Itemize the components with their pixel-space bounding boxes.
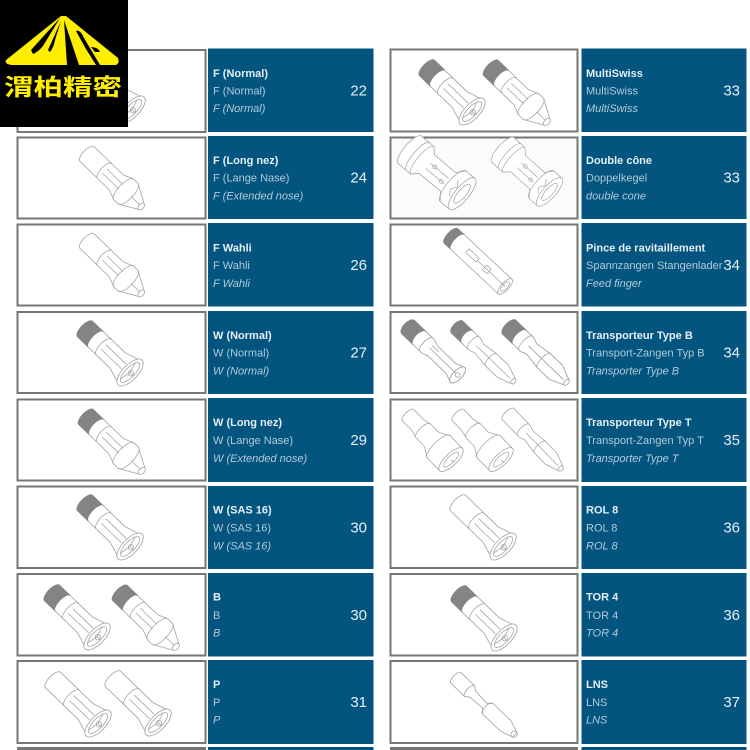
labels: MultiSwiss — [586, 103, 638, 115]
label panel — [582, 660, 746, 744]
labels: W (SAS 16) — [213, 504, 272, 516]
row: Double cone — [390, 131, 746, 219]
label panel — [582, 486, 746, 569]
row: P — [18, 660, 374, 744]
image panel — [390, 661, 578, 743]
image panel — [390, 50, 578, 132]
page number: 26 — [350, 257, 367, 274]
labels — [213, 242, 252, 290]
next row: cropped right panels — [390, 747, 746, 750]
image panel — [390, 400, 578, 480]
page number: 37 — [723, 694, 740, 711]
labels — [586, 242, 723, 290]
image panel — [390, 574, 578, 656]
collet drawings — [398, 316, 575, 391]
label panel — [208, 136, 374, 219]
collet drawing — [70, 488, 148, 564]
labels: Transporteur Type B — [586, 330, 693, 342]
image panel — [18, 50, 206, 132]
collet drawings — [38, 664, 176, 741]
row: F Wahli — [18, 223, 374, 306]
labels — [586, 155, 652, 202]
labels: W (Normal) — [213, 330, 272, 342]
labels — [213, 592, 221, 640]
label panel — [582, 311, 746, 394]
page number: 36 — [723, 520, 740, 536]
label panel — [582, 136, 746, 219]
page number: 22 — [350, 82, 367, 100]
row: F (Normal) — [18, 48, 374, 132]
collet drawing — [70, 314, 148, 390]
labels: Pince de ravitaillement — [586, 242, 706, 254]
labels — [213, 330, 272, 378]
image panel — [390, 486, 578, 568]
labels: P — [213, 679, 220, 691]
labels — [213, 417, 307, 465]
collet drawing — [74, 228, 153, 305]
next row: cropped left panels — [17, 747, 374, 750]
labels: Transporteur Type T — [586, 417, 692, 429]
page number: 31 — [350, 694, 367, 711]
page number: 30 — [350, 520, 367, 536]
page number: 24 — [350, 170, 367, 186]
label panel — [582, 573, 746, 656]
labels: F Wahli — [213, 260, 250, 272]
image panel — [18, 312, 206, 393]
labels — [586, 68, 643, 115]
labels: W (Extended nose) — [213, 453, 307, 465]
collet drawing — [449, 671, 522, 742]
row: TOR 4 — [390, 573, 746, 656]
row: LNS — [390, 660, 746, 744]
collet drawing — [444, 579, 522, 655]
collet drawing — [74, 141, 153, 218]
label panel — [582, 48, 746, 132]
image panel — [18, 224, 206, 306]
labels: TOR 4 — [586, 592, 619, 604]
logo text: 渭柏精密 — [4, 68, 122, 102]
labels: P — [213, 714, 221, 726]
image panel — [390, 312, 578, 393]
labels: Spannzangen Stangenlader — [586, 260, 723, 272]
row: Feed finger — [390, 223, 746, 306]
page number: 35 — [723, 432, 740, 449]
labels: W (Lange Nase) — [213, 435, 293, 447]
labels: W (Normal) — [213, 348, 269, 360]
labels: double cone — [586, 190, 646, 202]
row: Transporteur Type B — [390, 311, 746, 394]
icon: yellow fan mark — [6, 16, 119, 65]
labels: F (Normal) — [213, 103, 266, 115]
labels: Transporter Type T — [586, 453, 680, 465]
labels — [586, 679, 608, 726]
labels: Double cône — [586, 155, 652, 167]
labels: ROL 8 — [586, 504, 618, 516]
collet drawing — [443, 488, 521, 564]
labels — [213, 68, 268, 115]
page number: 34 — [723, 344, 740, 362]
labels: Doppelkegel — [586, 172, 647, 184]
collet drawing — [441, 226, 515, 297]
collet drawings — [394, 402, 568, 476]
image panel — [390, 138, 578, 218]
collet drawings — [412, 53, 559, 134]
labels: LNS — [586, 679, 608, 691]
labels: Transporter Type B — [586, 366, 679, 378]
row: W (Normal) — [18, 311, 374, 394]
image panel — [18, 486, 206, 568]
image panel — [18, 661, 206, 743]
labels: W (Normal) — [213, 366, 270, 378]
labels — [213, 679, 221, 726]
labels: W (Long nez) — [213, 417, 282, 429]
labels — [586, 330, 705, 378]
labels: F (Normal) — [213, 68, 268, 80]
page number: 33 — [723, 82, 740, 100]
labels: W (SAS 16) — [213, 522, 271, 534]
page number: 34 — [723, 257, 740, 274]
labels: B — [213, 610, 220, 622]
labels: F (Long nez) — [213, 155, 279, 167]
label panel — [582, 398, 746, 482]
page number: 30 — [350, 607, 367, 624]
labels: TOR 4 — [586, 628, 618, 640]
labels: MultiSwiss — [586, 86, 638, 98]
labels: Transport-Zangen Typ B — [586, 348, 705, 360]
collet drawing — [73, 404, 154, 483]
label panel — [208, 398, 374, 482]
labels: B — [213, 592, 221, 604]
page number: 33 — [723, 170, 740, 186]
labels: W (SAS 16) — [213, 540, 271, 552]
labels: B — [213, 628, 220, 640]
labels — [213, 504, 272, 552]
labels: F Wahli — [213, 278, 250, 290]
logo: black badge with yellow mark and Chinese name — [0, 0, 128, 127]
labels: F (Normal) — [213, 86, 266, 98]
collet drawing — [72, 51, 150, 127]
label panel — [208, 660, 374, 744]
page number: 29 — [350, 432, 367, 449]
labels: F (Lange Nase) — [213, 172, 289, 184]
labels — [213, 155, 304, 202]
labels: Transport-Zangen Typ T — [586, 435, 704, 447]
label panel — [208, 486, 374, 569]
labels: ROL 8 — [586, 540, 618, 552]
labels — [586, 592, 619, 640]
labels: LNS — [586, 714, 608, 726]
labels: MultiSwiss — [586, 68, 643, 80]
labels — [586, 504, 618, 552]
labels: F Wahli — [213, 242, 252, 254]
collet drawings — [393, 131, 567, 214]
image panel — [390, 224, 578, 306]
row: ROL 8 — [390, 486, 746, 569]
label panel — [208, 223, 374, 306]
label panel — [582, 223, 746, 306]
row: Transporteur Type T — [390, 398, 746, 482]
labels: P — [213, 697, 220, 709]
image panel — [18, 574, 206, 656]
row: W (SAS 16) — [18, 486, 374, 569]
row: W (Long nez) — [18, 398, 374, 483]
image panel — [18, 138, 206, 218]
image panel — [18, 400, 206, 480]
page number: 36 — [723, 607, 740, 624]
row: B — [18, 573, 374, 659]
row: MultiSwiss — [390, 48, 746, 134]
labels: ROL 8 — [586, 522, 617, 534]
collet drawings — [37, 578, 188, 659]
labels: LNS — [586, 697, 607, 709]
labels — [586, 417, 704, 465]
labels: Feed finger — [586, 278, 643, 290]
label panel — [208, 311, 374, 394]
label panel — [208, 48, 374, 132]
page number: 27 — [350, 344, 367, 362]
labels: F (Extended nose) — [213, 190, 304, 202]
labels: TOR 4 — [586, 610, 618, 622]
label panel — [208, 573, 374, 656]
row: F (Long nez) — [18, 136, 374, 219]
